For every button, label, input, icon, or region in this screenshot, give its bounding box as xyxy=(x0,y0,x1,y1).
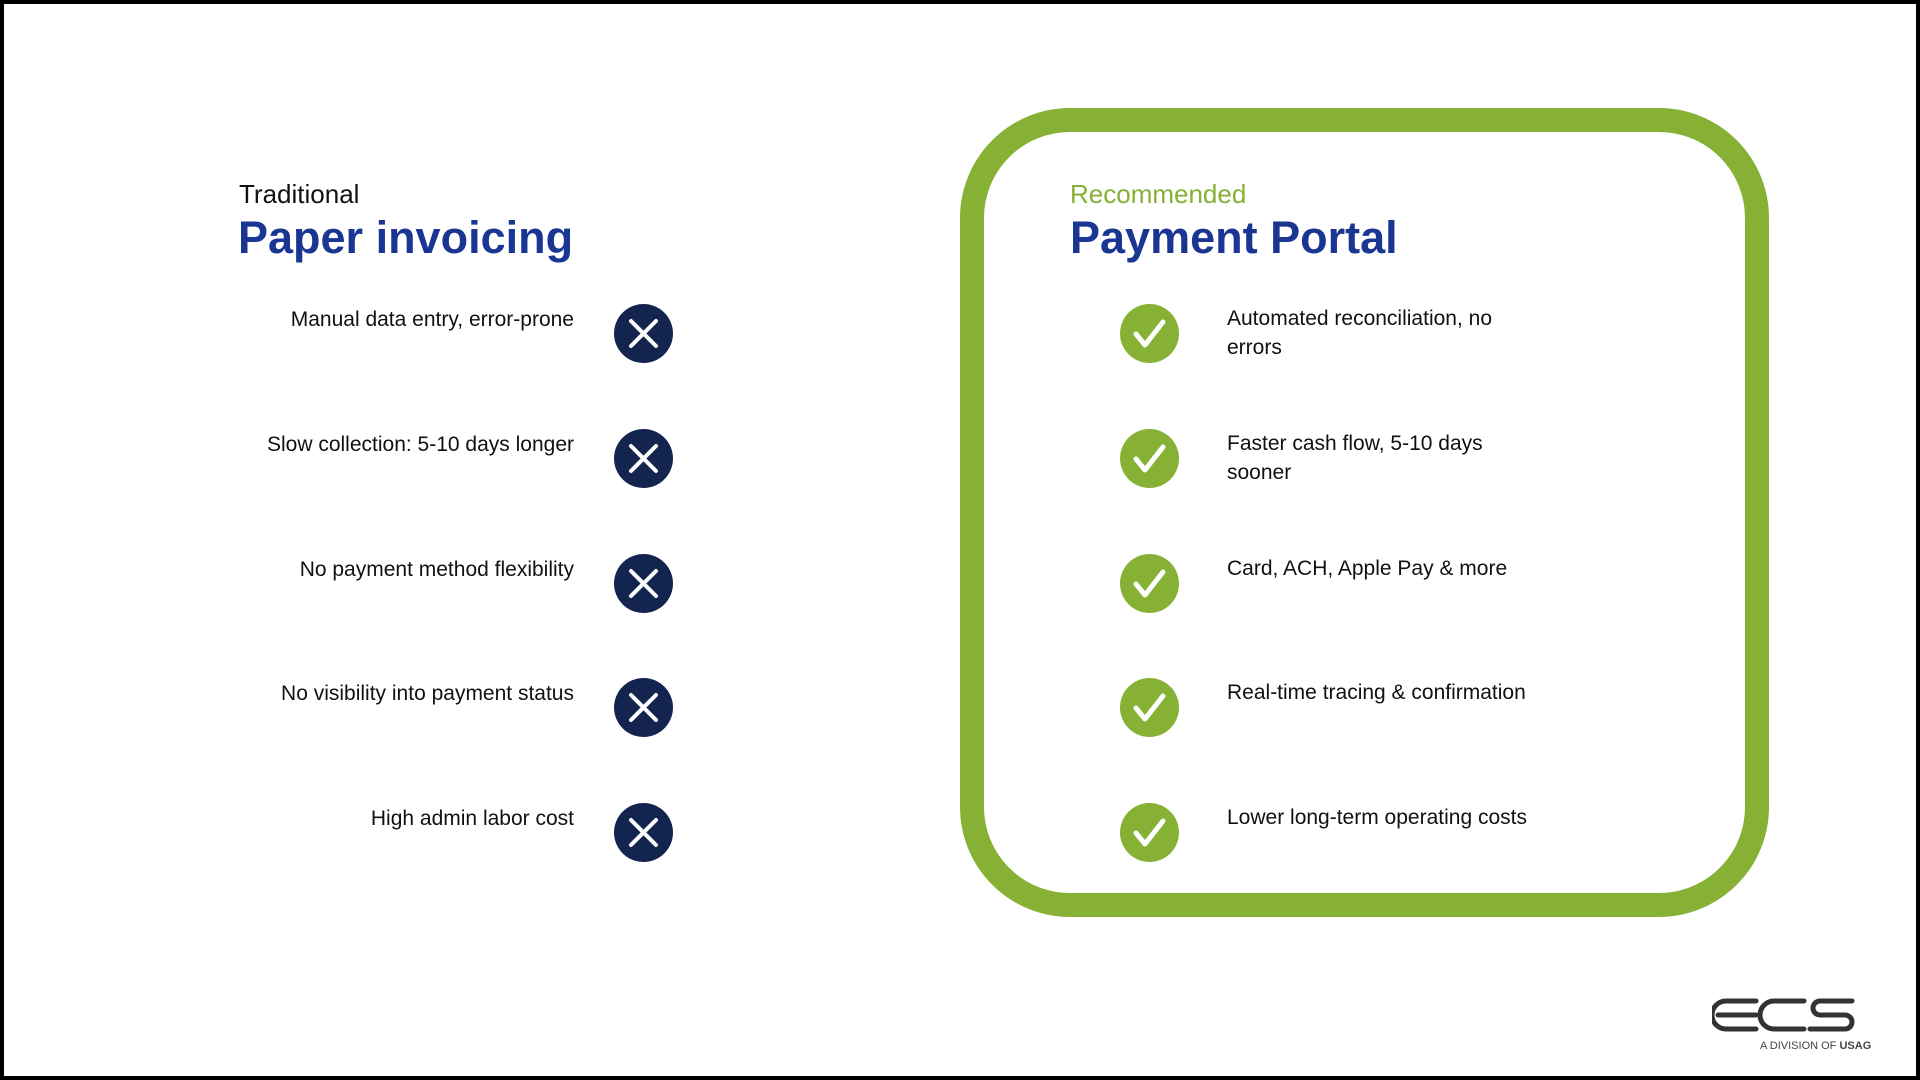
heading: traditional label: Traditional xyxy=(239,179,359,209)
icon: check 4 xyxy=(1120,678,1179,737)
icon: x 4 xyxy=(614,678,673,737)
text: manual data entry: Manual data entry, error-prone xyxy=(291,308,574,331)
panel: recommended green box xyxy=(960,108,1769,917)
heading: paper invoicing: Paper invoicing xyxy=(238,212,573,263)
icon: check 5 xyxy=(1120,803,1179,862)
heading: payment portal: Payment Portal xyxy=(1070,212,1398,263)
logo: ecs: A DIVISION OF USAG xyxy=(1760,1040,1871,1052)
text: faster cash flow: Faster cash flow, 5-10 days sooner xyxy=(1227,432,1483,484)
text: no payment flexibility: No payment method flexibility xyxy=(300,558,574,581)
text: automated reconciliation: Automated reconciliation, no errors xyxy=(1227,307,1492,359)
text: high admin cost: High admin labor cost xyxy=(371,807,574,830)
icon: check 2 xyxy=(1120,429,1179,488)
icon: x 5 xyxy=(614,803,673,862)
text: card ach: Card, ACH, Apple Pay & more xyxy=(1227,557,1507,580)
icon: x 1 xyxy=(614,304,673,363)
icon: check 3 xyxy=(1120,554,1179,613)
icon: x 2 xyxy=(614,429,673,488)
icon: check 1 xyxy=(1120,304,1179,363)
text: real-time tracing: Real-time tracing & confirmation xyxy=(1227,681,1526,704)
heading: recommended label: Recommended xyxy=(1070,179,1246,209)
logo: ecs xyxy=(1712,998,1871,1052)
text: lower costs: Lower long-term operating costs xyxy=(1227,806,1527,829)
icon: x 3 xyxy=(614,554,673,613)
text: no visibility: No visibility into payment status xyxy=(281,682,574,705)
text: slow collection: Slow collection: 5-10 days longer xyxy=(267,433,574,456)
